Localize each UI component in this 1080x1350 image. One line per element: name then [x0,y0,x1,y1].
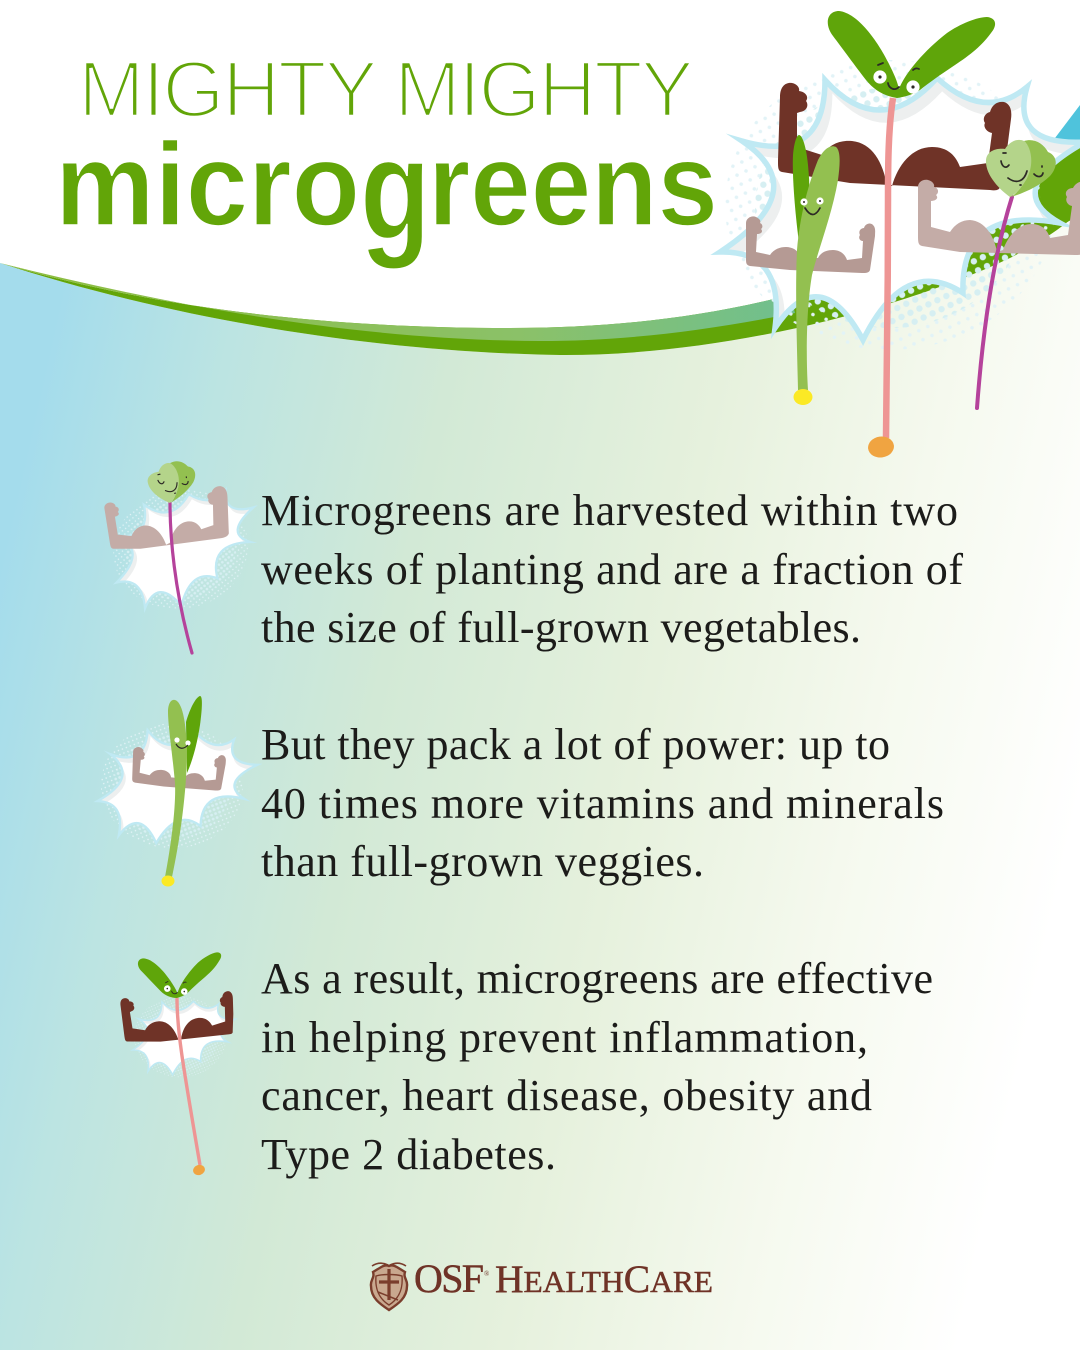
spinach sprout leaf with face [986,140,1056,197]
title line: microgreens [55,109,718,270]
title line: microgreens: reens [428,119,718,251]
tall sprout leaves with face [828,11,995,98]
paragraph 2: But they pack a lot of power: up to [261,720,890,769]
onion sprout seed [794,389,812,405]
paragraph 2: 40 times more vitamins and minerals [261,779,944,828]
paragraph 2 [261,720,944,886]
onion sprout light leaf [796,146,840,390]
title line: microgreens: micro [55,119,360,251]
paragraph 1 [261,486,963,652]
paragraph 3: Type 2 diabetes. [261,1130,556,1179]
paragraph 3 [261,954,933,1179]
paragraph 1: the size of full-grown vegetables. [261,603,861,652]
OSF HealthCare logo [371,1256,713,1310]
paragraph 1: Microgreens are harvested within two [261,486,958,535]
icon: spinach sprout flexing [100,457,272,653]
paragraph 3: in helping prevent inflammation, [261,1013,868,1062]
spinach sprout stem [977,197,1012,408]
title line: MIGHTY MIGHTY: MIGHTY MIGHTY [78,44,694,134]
green leaf patch behind burst [1040,145,1080,225]
title line: microgreens: g [360,109,431,270]
brown arms of tall sprout [778,83,1011,190]
OSF HealthCare logo: HEALTHCARE [495,1258,713,1301]
white header area [0,0,1080,355]
hero illustration: three flexing microgreens [720,11,1080,459]
paragraph 3: cancer, heart disease, obesity and [261,1071,872,1120]
paragraph 1: weeks of planting and are a fraction of [261,545,963,594]
icon: tall sprout flexing [119,949,238,1177]
blue corner accent [1055,105,1080,150]
icon: onion sprout flexing [95,696,261,886]
halftone dots [725,60,1055,350]
arms of onion sprout [746,216,875,273]
OSF HealthCare logo: ® [484,1270,490,1278]
onion sprout face [800,197,824,214]
green swoosh [0,150,1080,355]
title [55,44,718,270]
tall sprout stem [886,98,893,438]
onion sprout dark leaf [793,135,809,250]
comic burst [720,78,1080,348]
logo wordmark: OSF [414,1256,484,1301]
tall sprout seed [867,435,895,459]
paragraph 2: than full-grown veggies. [261,837,704,886]
paragraph 3: As a result, microgreens are effective [261,954,933,1003]
arms of spinach sprout [918,180,1080,255]
logo crest [371,1263,407,1310]
